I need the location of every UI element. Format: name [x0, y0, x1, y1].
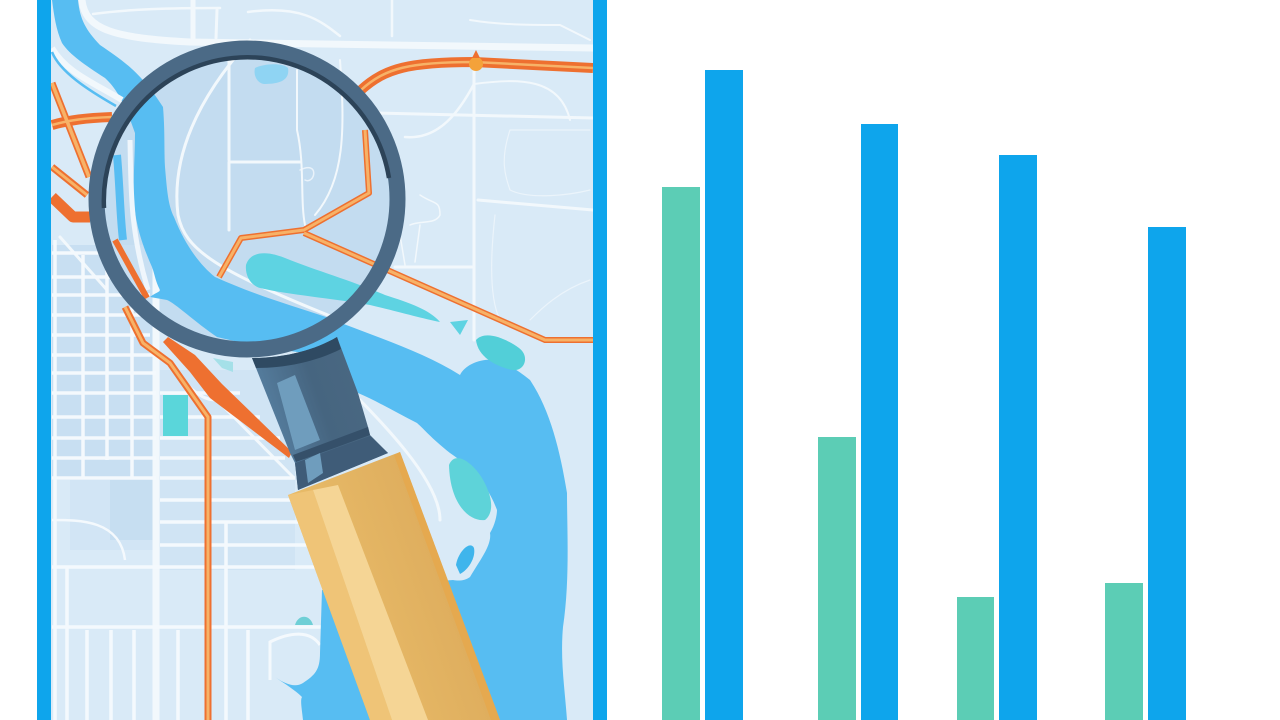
bar chart — [662, 70, 1186, 720]
river — [52, 0, 568, 720]
bar group 2 — [818, 124, 898, 720]
bar group 3 — [957, 155, 1037, 720]
islands and lakes — [163, 64, 525, 625]
side channels — [52, 48, 148, 290]
street grid: city blocks — [52, 240, 345, 720]
magnifier neck — [252, 337, 388, 490]
icon: magnifying glass — [96, 48, 500, 720]
magnifier wooden handle — [288, 452, 500, 720]
highways — [52, 62, 593, 720]
bar group 1 — [662, 70, 743, 720]
magnifier ring — [96, 48, 398, 350]
highway interchange marker — [469, 50, 483, 71]
panel: city map illustration — [37, 0, 607, 720]
bar group 4 — [1105, 227, 1186, 720]
street network: major roads — [60, 0, 593, 720]
